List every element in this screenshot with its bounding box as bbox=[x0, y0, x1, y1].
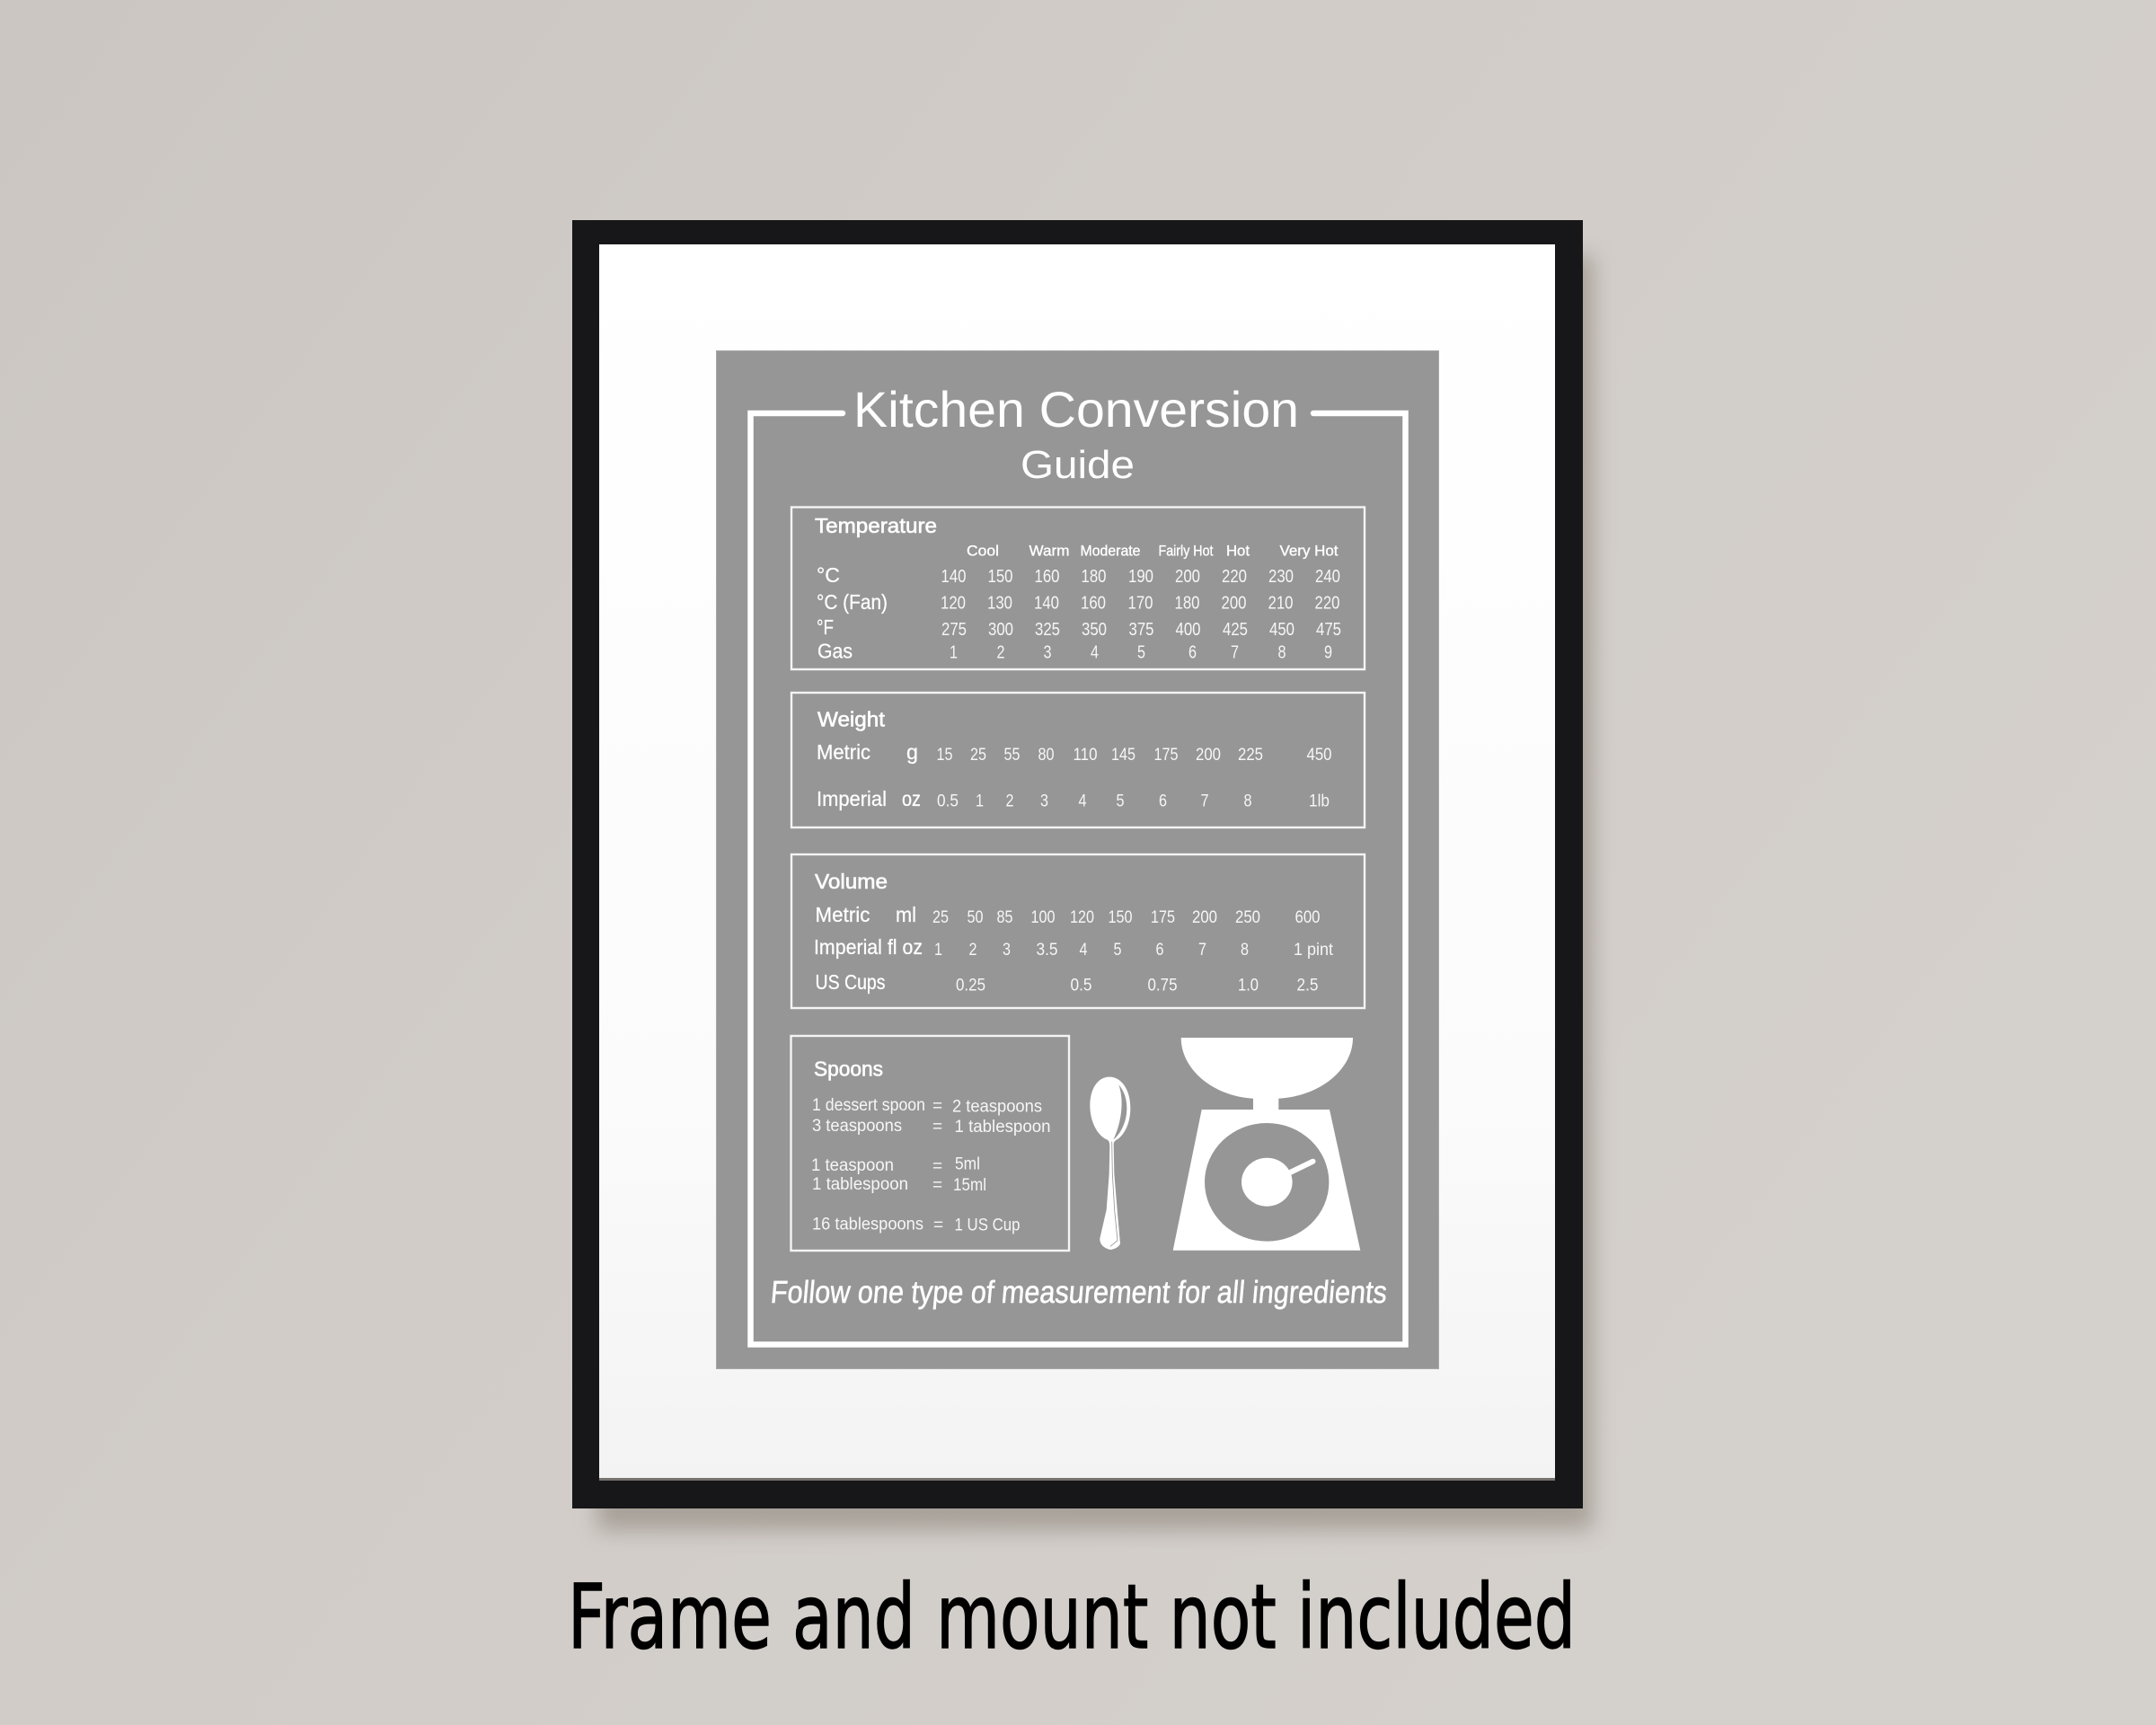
row: celsius: 240 bbox=[1315, 567, 1340, 587]
spoon equivalences: 5ml bbox=[955, 1155, 980, 1173]
row: celsius: 150 bbox=[988, 567, 1013, 587]
row: gas mark: 5 bbox=[1137, 643, 1145, 663]
row: imperial ounces: Imperial bbox=[817, 787, 887, 810]
row: imperial fluid ounces: 2 bbox=[968, 941, 977, 960]
row: imperial fluid ounces: 3 bbox=[1003, 941, 1011, 960]
row: metric millilitres: ml bbox=[896, 903, 916, 926]
caption: Frame and mount not included bbox=[568, 1566, 1576, 1669]
spoon equivalences: 1 dessert spoon bbox=[812, 1096, 925, 1115]
row: fahrenheit bbox=[817, 615, 1341, 640]
spoon equivalences: = bbox=[933, 1216, 943, 1234]
row: imperial ounces: 1 bbox=[976, 792, 984, 810]
row: celsius: 180 bbox=[1082, 567, 1107, 587]
row: metric grams: 225 bbox=[1238, 746, 1263, 765]
row: metric millilitres: Metric bbox=[816, 903, 870, 926]
row: celsius fan: 170 bbox=[1128, 593, 1153, 613]
row: celsius: 160 bbox=[1035, 567, 1060, 587]
row: fahrenheit: 350 bbox=[1082, 620, 1107, 640]
row: fahrenheit: 475 bbox=[1316, 620, 1341, 640]
row: gas mark: 9 bbox=[1324, 643, 1332, 663]
row: metric grams: 80 bbox=[1038, 746, 1055, 765]
row: gas mark: 7 bbox=[1231, 643, 1239, 663]
row: imperial fluid ounces bbox=[814, 935, 1334, 960]
row: celsius: 230 bbox=[1268, 567, 1294, 587]
black picture frame bbox=[572, 220, 1583, 1508]
row: imperial ounces: 7 bbox=[1200, 792, 1209, 810]
row: celsius fan: 160 bbox=[1081, 593, 1106, 613]
panel: weight bbox=[791, 693, 1365, 827]
row: fahrenheit: 325 bbox=[1035, 620, 1060, 640]
row: imperial ounces: 0.5 bbox=[937, 792, 959, 810]
row: US cups: 0.5 bbox=[1071, 976, 1092, 995]
row: imperial fluid ounces: 4 bbox=[1080, 941, 1088, 960]
row: celsius bbox=[817, 563, 1340, 587]
row: gas mark bbox=[817, 640, 1332, 663]
row: celsius: 220 bbox=[1222, 567, 1247, 587]
row: metric grams: 145 bbox=[1111, 746, 1135, 765]
row: imperial ounces: oz bbox=[902, 787, 921, 810]
row: celsius fan: 180 bbox=[1175, 593, 1200, 613]
row: celsius fan: 120 bbox=[941, 593, 966, 613]
row: US cups bbox=[816, 970, 1319, 995]
row: metric grams: 15 bbox=[936, 746, 952, 765]
heading: temperature: Temperature bbox=[815, 514, 937, 537]
frame shadow bbox=[597, 256, 1593, 1530]
spoon equivalences: = bbox=[932, 1097, 942, 1116]
row: metric grams: 450 bbox=[1306, 746, 1331, 765]
row: imperial ounces: 4 bbox=[1078, 792, 1087, 810]
row: metric millilitres bbox=[816, 903, 1321, 927]
row: imperial fluid ounces: 6 bbox=[1155, 941, 1164, 960]
row: imperial fluid ounces: 3.5 bbox=[1037, 941, 1058, 960]
row: imperial ounces: 8 bbox=[1243, 792, 1252, 810]
row: US cups: 0.75 bbox=[1148, 976, 1177, 995]
row: metric millilitres: 120 bbox=[1070, 908, 1094, 927]
row: US cups: 0.25 bbox=[956, 976, 985, 995]
row: gas mark: 6 bbox=[1188, 643, 1197, 663]
subtitle: Guide bbox=[1021, 443, 1135, 487]
row: metric grams: 110 bbox=[1073, 746, 1098, 765]
heat categories row: Very Hot bbox=[1279, 543, 1339, 559]
row: celsius: 200 bbox=[1175, 567, 1200, 587]
row: metric grams: 175 bbox=[1153, 746, 1179, 765]
row: celsius fan: 200 bbox=[1222, 593, 1247, 613]
row: US cups: US Cups bbox=[816, 970, 886, 994]
row: celsius: 140 bbox=[941, 567, 967, 587]
panel: temperature bbox=[791, 507, 1365, 669]
row: celsius fan: 220 bbox=[1315, 593, 1340, 613]
row: fahrenheit: 300 bbox=[988, 620, 1013, 640]
row: imperial ounces: 6 bbox=[1159, 792, 1167, 810]
row: metric millilitres: 175 bbox=[1151, 908, 1175, 927]
footer note: Follow one type of measurement for all ingredients bbox=[769, 1275, 1389, 1310]
row: imperial ounces: 3 bbox=[1040, 792, 1048, 810]
row: fahrenheit: 400 bbox=[1175, 620, 1200, 640]
row: celsius fan bbox=[817, 590, 1340, 614]
row: imperial fluid ounces: 5 bbox=[1114, 941, 1121, 960]
white mount bbox=[599, 244, 1555, 1481]
row: fahrenheit: 375 bbox=[1128, 620, 1153, 640]
icon: kitchen scale bbox=[1173, 1038, 1360, 1251]
row: metric millilitres: 25 bbox=[932, 908, 949, 927]
row: fahrenheit: 425 bbox=[1223, 620, 1248, 640]
spoon equivalences: 1 US Cup bbox=[954, 1216, 1021, 1234]
row: celsius fan: 130 bbox=[987, 593, 1012, 613]
row: metric millilitres: 200 bbox=[1192, 908, 1217, 927]
row: metric millilitres: 50 bbox=[967, 908, 983, 927]
row: gas mark: 2 bbox=[997, 643, 1004, 663]
row: imperial fluid ounces: 8 bbox=[1241, 941, 1249, 960]
row: gas mark: 1 bbox=[950, 643, 958, 663]
row: metric millilitres: 85 bbox=[997, 908, 1013, 927]
row: imperial ounces: 1lb bbox=[1309, 792, 1330, 810]
row: imperial ounces: 5 bbox=[1116, 792, 1125, 810]
row: metric grams: 200 bbox=[1196, 746, 1221, 765]
row: US cups: 2.5 bbox=[1297, 976, 1319, 995]
heat categories row: Warm bbox=[1029, 543, 1069, 559]
heat categories row: Fairly Hot bbox=[1159, 543, 1214, 559]
row: gas mark: 4 bbox=[1091, 643, 1099, 663]
row: US cups: 1.0 bbox=[1238, 976, 1259, 995]
spoon equivalences: 1 teaspoon bbox=[811, 1156, 894, 1175]
row: metric grams: g bbox=[906, 740, 918, 764]
row: imperial fluid ounces: Imperial fl oz bbox=[814, 935, 923, 959]
row: metric grams bbox=[817, 740, 1331, 765]
spoon equivalences: = bbox=[932, 1118, 942, 1137]
row: metric grams: 25 bbox=[970, 746, 986, 765]
heat categories row: Hot bbox=[1226, 543, 1250, 559]
row: celsius fan: 140 bbox=[1034, 593, 1059, 613]
icon: spoon bbox=[1090, 1077, 1130, 1250]
row: fahrenheit: 450 bbox=[1269, 620, 1294, 640]
row: metric grams: 55 bbox=[1004, 746, 1021, 765]
spoon equivalences: 16 tablespoons bbox=[812, 1215, 923, 1234]
row: fahrenheit: 275 bbox=[941, 620, 967, 640]
row: imperial ounces bbox=[817, 787, 1330, 810]
row: imperial fluid ounces: 1 bbox=[934, 941, 942, 960]
heat categories row bbox=[967, 543, 1339, 559]
row: gas mark: Gas bbox=[817, 640, 853, 663]
spoon equivalences: 2 teaspoons bbox=[952, 1098, 1042, 1116]
heat categories row: Cool bbox=[967, 543, 999, 559]
heat categories row: Moderate bbox=[1080, 543, 1141, 559]
heading: weight: Weight bbox=[817, 708, 886, 731]
panel: spoons bbox=[791, 1036, 1069, 1251]
panel: volume bbox=[791, 854, 1365, 1008]
row: metric millilitres: 100 bbox=[1031, 908, 1055, 927]
row: metric millilitres: 600 bbox=[1295, 908, 1321, 927]
row: celsius fan: 210 bbox=[1268, 593, 1294, 613]
spoon equivalences: 1 tablespoon bbox=[812, 1175, 908, 1194]
row: metric millilitres: 150 bbox=[1109, 908, 1132, 927]
row: celsius: °C bbox=[817, 563, 840, 587]
spoon equivalences: 3 teaspoons bbox=[812, 1117, 902, 1136]
poster border bracket bbox=[751, 413, 1405, 1344]
spoon equivalences bbox=[811, 1096, 1051, 1234]
row: fahrenheit: °F bbox=[817, 615, 834, 639]
row: gas mark: 3 bbox=[1044, 643, 1051, 663]
row: gas mark: 8 bbox=[1277, 643, 1286, 663]
spoon equivalences: 1 tablespoon bbox=[954, 1118, 1051, 1137]
row: imperial ounces: 2 bbox=[1006, 792, 1013, 810]
heading: volume: Volume bbox=[815, 870, 888, 893]
title: Kitchen Conversion bbox=[853, 381, 1299, 438]
spoon equivalences: 15ml bbox=[953, 1176, 986, 1195]
row: imperial fluid ounces: 7 bbox=[1198, 941, 1206, 960]
row: celsius: 190 bbox=[1128, 567, 1153, 587]
spoon equivalences: = bbox=[932, 1157, 942, 1176]
row: imperial fluid ounces: 1 pint bbox=[1294, 941, 1334, 960]
grey poster bbox=[716, 350, 1439, 1369]
spoon equivalences: = bbox=[932, 1176, 942, 1195]
row: celsius fan: °C (Fan) bbox=[817, 590, 888, 614]
heading: spoons: Spoons bbox=[814, 1057, 883, 1080]
row: metric grams: Metric bbox=[817, 740, 870, 764]
row: metric millilitres: 250 bbox=[1235, 908, 1260, 927]
